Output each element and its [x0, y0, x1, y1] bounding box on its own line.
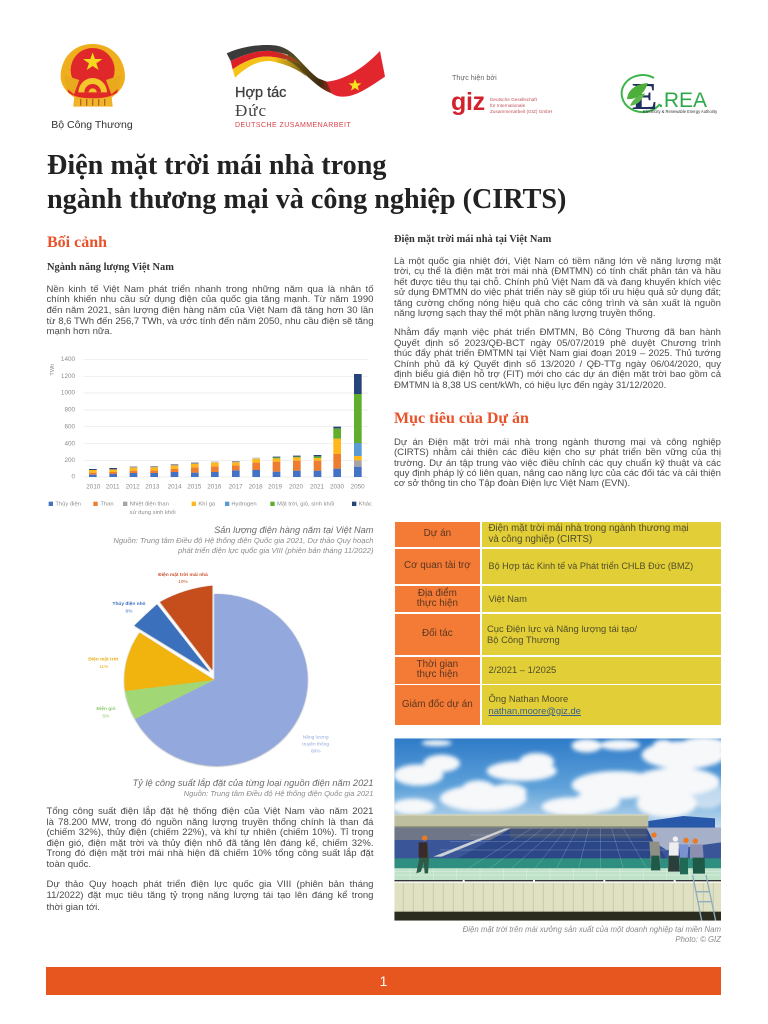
stacked bar chart: annual electricity output: 200 [64, 457, 75, 464]
text block: policy: Nhằm đẩy mạnh việc phát triển ĐMTMN, Bộ Công Thương đã ban hành [394, 327, 721, 338]
caption: pie chart source [133, 778, 374, 798]
legend: Hydrogen [231, 502, 257, 508]
text block: policy: Chính phủ đã ký Quyết định số 13/2020 / QĐ-TTg ngày 06/04/2020, quy [394, 359, 721, 370]
table: project facts: Bộ Công Thương [487, 634, 560, 645]
stacked bar chart: annual electricity output: 1400 [61, 356, 75, 363]
series: Hydrogen [354, 443, 362, 456]
stacked bar chart: annual electricity output: 2030 [330, 483, 345, 490]
text block: policy [394, 326, 722, 391]
photo: workers on solar roof [394, 738, 721, 921]
text block: policy: định biểu giá điện hỗ trợ (FIT) mới cho các dự án điện mặt trời bao gồm cả [394, 369, 721, 380]
text block: installed capacity: Trong đó điện mặt trời mái nhà hiện đã chiếm 10% tổng công suất lắp đặt [46, 848, 374, 859]
table: project facts: Đối tác [422, 628, 453, 639]
pie chart: installed capacity share 2021: Điện gió [96, 706, 116, 712]
table: project facts: Việt Nam [488, 593, 527, 604]
pie chart: installed capacity share 2021: 6% [126, 608, 133, 614]
series: Nhiệt điện than sử dụng sinh khối [354, 460, 362, 467]
text block: policy: ĐMTMN là 8,38 US cent/kWh, có hiệu lực đến ngày 31/12/2020. [394, 380, 666, 391]
legend [49, 501, 372, 516]
stacked bar chart: annual electricity output: 2014 [168, 483, 182, 490]
text block: policy: Quyết định số 2023/QĐ-BCT ngày 05/07/2019 phê duyệt Chương trình [394, 338, 721, 349]
pie chart: installed capacity share 2021: truyền thống [302, 742, 329, 748]
series: Thủy điện [89, 467, 362, 477]
stacked bar chart: annual electricity output: 2012 [126, 483, 140, 490]
pie chart: installed capacity share 2021: 11% [99, 664, 109, 670]
stacked bar chart: annual electricity output: 800 [64, 407, 75, 414]
text block: rooftop solar in Vietnam: năng lượng sạch thay thế một phần năng lượng truyền thống. [394, 308, 656, 319]
text block: installed capacity [46, 806, 374, 870]
slice: Thủy điện nhỏ [134, 604, 210, 672]
text block: energy sector intro [46, 284, 374, 337]
stacked bar chart: annual electricity output: 2017 [229, 483, 243, 490]
table: project facts: nathan.moore@giz.de [488, 705, 581, 716]
table: project facts: Thời gian [417, 659, 458, 670]
stacked bar chart: annual electricity output: 2020 [289, 483, 304, 490]
stacked bar chart: annual electricity output: 2018 [249, 483, 263, 490]
logo: EREA [620, 74, 718, 114]
caption: bar chart source: phát triển điện lực quốc gia VIII (phiên bản tháng 11/2022) [178, 546, 374, 555]
stacked bar chart: annual electricity output: 1200 [61, 373, 75, 380]
legend: Thủy điện [55, 501, 81, 508]
text block: project objective: Dự án Điện mặt trời mái nhà trong ngành thương mại và công nghiệp [394, 437, 721, 448]
table: project facts: Giám đốc dự án [402, 699, 473, 710]
text block: project objective: quy định pháp lý có liên quan, nâng cao năng lực của các đối tác và cải thiện [394, 468, 721, 479]
slice: Điện gió [125, 680, 214, 719]
stacked bar chart: annual electricity output: 400 [64, 440, 75, 447]
logo: giz: Thực hiện bởi [452, 73, 497, 82]
logo: Bộ Công Thương emblem: Bộ Công Thương [51, 119, 133, 131]
text block: rooftop solar in Vietnam: trời, cụ thể là điện mặt trời mái nhà (ĐMTMN) có tính chất phân tán và hầu [394, 266, 721, 277]
logo: Bộ Công Thương emblem [51, 44, 133, 131]
logo: EREA: .REA [658, 89, 707, 112]
workers [416, 832, 705, 874]
text block: rooftop solar in Vietnam: tăng cường chống nóng hiệu quả cho các công trình và sản xuất là nguồn [394, 298, 721, 309]
text block: rooftop solar in Vietnam [394, 256, 721, 319]
stacked bar chart: annual electricity output: 2015 [187, 483, 202, 490]
pie chart: installed capacity share 2021: 5% [103, 713, 110, 719]
text block: energy sector intro: Nền kinh tế Việt Nam phát triển nhanh trong những năm qua là nhân tố [46, 284, 374, 294]
table: project facts: Ông Nathan Moore [488, 693, 568, 704]
logo: Hợp tác Đức: Đức [235, 101, 267, 120]
table: project facts: Bộ Hợp tác Kinh tế và Phát triển CHLB Đức (BMZ) [488, 561, 693, 571]
legend: Khí ga [198, 502, 216, 508]
legend: sử dụng sinh khối [130, 509, 176, 516]
caption: photo: Photo: © GIZ [675, 934, 721, 944]
slice: Năng lượng truyền thống [135, 594, 308, 766]
text block: draft power plan: thời gian tới. [46, 902, 100, 913]
title: ngành thương mại và công nghiệp (CIRTS) [47, 184, 566, 215]
table: project facts [395, 522, 721, 725]
text block: energy sector intro: từ 8,6 TWh đến 256,7 TWh, và ước tính đến năm 2050, nhu cầu điện sẽ tăng [46, 316, 374, 327]
text block: draft power plan: Dự thảo Quy hoạch phát triển điện lực quốc gia VIII (phiên bản tháng [46, 879, 374, 890]
logo: Hợp tác Đức: DEUTSCHE ZUSAMMENARBEIT [235, 122, 351, 129]
text block: energy sector intro: chính khiến nhu cầu sử dụng điện của quốc gia tăng mạnh. Từ năm 1990 [46, 294, 374, 305]
legend: Mặt trời, gió, sinh khối [277, 502, 334, 508]
stacked bar chart: annual electricity output: 2019 [268, 483, 283, 490]
text block: project objective [394, 437, 721, 489]
logo: EREA: Electricity & Renewable Energy Authority [643, 109, 717, 114]
text block: project objective: cơ sở thông tin cho Tập đoàn Điện lực Việt Nam (EVN). [394, 478, 630, 489]
series: Than [89, 454, 341, 475]
title: Điện mặt trời mái nhà trong [47, 150, 386, 181]
logo: Hợp tác Đức [226, 45, 385, 129]
logo: Hợp tác Đức: Hợp tác [235, 85, 286, 101]
text block: installed capacity: (chiếm 32%), thủy điện (chiếm 22%), và khí tự nhiên (chiếm 10%). Tỉ trọng [46, 827, 374, 838]
text block: rooftop solar in Vietnam: sử dụng ĐMTMN do việc phát triển này sẽ giúp tối ưu hiệu quả sử dụng đất; [394, 287, 721, 298]
text block: installed capacity: điện gió, điện mặt trời và thủy điện nhỏ đã tăng lên đáng kể, chiếm 32%. [46, 838, 374, 848]
series: Khác [89, 374, 362, 470]
stacked bar chart: annual electricity output: 0 [71, 474, 75, 481]
stacked bar chart: annual electricity output: 2016 [207, 483, 222, 490]
stacked bar chart: annual electricity output: 2013 [145, 483, 160, 490]
table: project facts: Cục Điện lực và Năng lượng tái tạo/ [487, 623, 637, 634]
logo: giz: für Internationale [490, 103, 525, 108]
footer bar with page number: 1 [380, 973, 387, 989]
caption: photo [462, 925, 722, 944]
stacked bar chart: annual electricity output: 2011 [106, 483, 120, 490]
text block: energy sector intro: mạnh hơn nữa. [46, 326, 112, 337]
stacked bar chart: annual electricity output: TWh [50, 364, 56, 376]
caption: photo: Điện mặt trời trên mái xưởng sản xuất của một doanh nghiệp tại miền Nam [463, 925, 721, 934]
text block: policy: thúc đẩy phát triển ĐMTMN tại Việt Nam giai đoạn 2019 – 2025. Thủ tướng [394, 348, 721, 359]
table: project facts: Dự án [424, 528, 451, 539]
slice: Điện mặt trời [124, 633, 214, 691]
text block: project objective: (CIRTS) nhằm cải thiện các điều kiện cho sự phát triển bền vững của thị [394, 447, 721, 458]
stacked bar chart: annual electricity output: 600 [64, 423, 75, 430]
text block: rooftop solar in Vietnam: Là một quốc gia nhiệt đới, Việt Nam có tiềm năng lớn về năng lượng mặt [394, 256, 721, 267]
logo: giz: giz [451, 88, 485, 116]
caption: pie chart source: Nguồn: Trung tâm Điều độ Hệ thống điện Quốc gia 2021 [184, 789, 374, 798]
slice: Điện mặt trời mái nhà [160, 586, 212, 670]
pie chart: installed capacity share 2021: 68% [311, 749, 321, 755]
table: project facts: và công nghiệp (CIRTS) [488, 534, 592, 545]
text block: installed capacity: toàn quốc. [46, 858, 91, 870]
stacked bar chart: annual electricity output: 2010 [86, 483, 101, 490]
text block: project objective: trường. Dự án tập trung vào việc điều chỉnh các quy chuẩn kỹ thuật và các [394, 458, 721, 469]
text block: draft power plan: 11/2022) đặt mục tiêu tăng tỷ trọng năng lượng tái tạo lên đáng kể trong [46, 890, 374, 901]
heading: Bối cảnh: Bối cảnh [47, 234, 107, 250]
series: Mặt trời, gió, sinh khối [273, 394, 362, 458]
legend: Nhiệt điện than [130, 502, 169, 508]
pie chart: installed capacity share 2021: 10% [178, 579, 189, 585]
table: project facts: Cơ quan tài trợ [404, 560, 471, 571]
caption: bar chart source: Sản lượng điện hàng năm tại Việt Nam [214, 525, 374, 535]
caption: bar chart source: Nguồn: Trung tâm Điều độ Hệ thống điện Quốc gia 2021, Dự thảo Quy hoạch [113, 536, 374, 545]
pie chart: installed capacity share 2021: Năng lượng [303, 734, 329, 740]
stacked bar chart: annual electricity output: 2050 [351, 483, 365, 490]
pie chart: installed capacity share 2021: Điện mặt trời [88, 657, 118, 663]
table: project facts: 2/2021 – 1/2025 [488, 664, 556, 675]
table: project facts: Địa điểm [418, 588, 457, 598]
stacked bar chart: annual electricity output: 2021 [310, 483, 325, 490]
table: project facts: thực hiện [417, 598, 458, 609]
subheading: Điện mặt trời mái nhà tại Việt Nam: Điện mặt trời mái nhà tại Việt Nam [394, 234, 551, 245]
caption: bar chart source [113, 525, 374, 555]
legend: Khác [359, 502, 372, 508]
table: project facts: Điện mặt trời mái nhà trong ngành thương mại [488, 523, 689, 534]
text block: installed capacity: là 78.200 MW, trong đó nguồn năng lượng truyền thống chính là than đá [46, 816, 374, 828]
series: Khí ga [89, 439, 362, 473]
pie chart: installed capacity share 2021: Điện mặt trời mái nhà [158, 572, 208, 578]
table: project facts: thực hiện [417, 669, 458, 680]
logo: giz: Deutsche Gesellschaft [490, 97, 537, 102]
text block: rooftop solar in Vietnam: hết được tiêu thụ tại chỗ. Chính phủ Việt Nam đã và đang khuyến khích việc [394, 277, 721, 288]
title [47, 150, 566, 215]
pie chart: installed capacity share 2021 [88, 572, 329, 768]
logo: giz [451, 73, 552, 116]
footer bar with page number [46, 967, 721, 995]
caption: pie chart source: Tỷ lệ công suất lắp đặt của từng loại nguồn điện năm 2021 [133, 778, 374, 788]
stacked bar chart: annual electricity output: 1000 [61, 390, 75, 397]
pie chart: installed capacity share 2021: Thủy điện nhỏ [112, 601, 146, 607]
text block: draft power plan [46, 879, 374, 913]
text block: energy sector intro: đến năm 2021, sản lượng điện hàng năm của Việt Nam đã tăng hơn 30 lần [46, 305, 374, 316]
text block: installed capacity: Tổng công suất điện lắp đặt hệ thống điện của Việt Nam vào năm 2021 [46, 806, 374, 817]
subheading: Ngành năng lượng Việt Nam: Ngành năng lượng Việt Nam [47, 262, 174, 273]
legend: Than [100, 502, 114, 508]
stacked bar chart: annual electricity output [48, 356, 372, 516]
heading: Mục tiêu của Dự án: Mục tiêu của Dự án [394, 410, 529, 426]
logo: giz: Zusammenarbeit (GIZ) GmbH [490, 109, 552, 114]
